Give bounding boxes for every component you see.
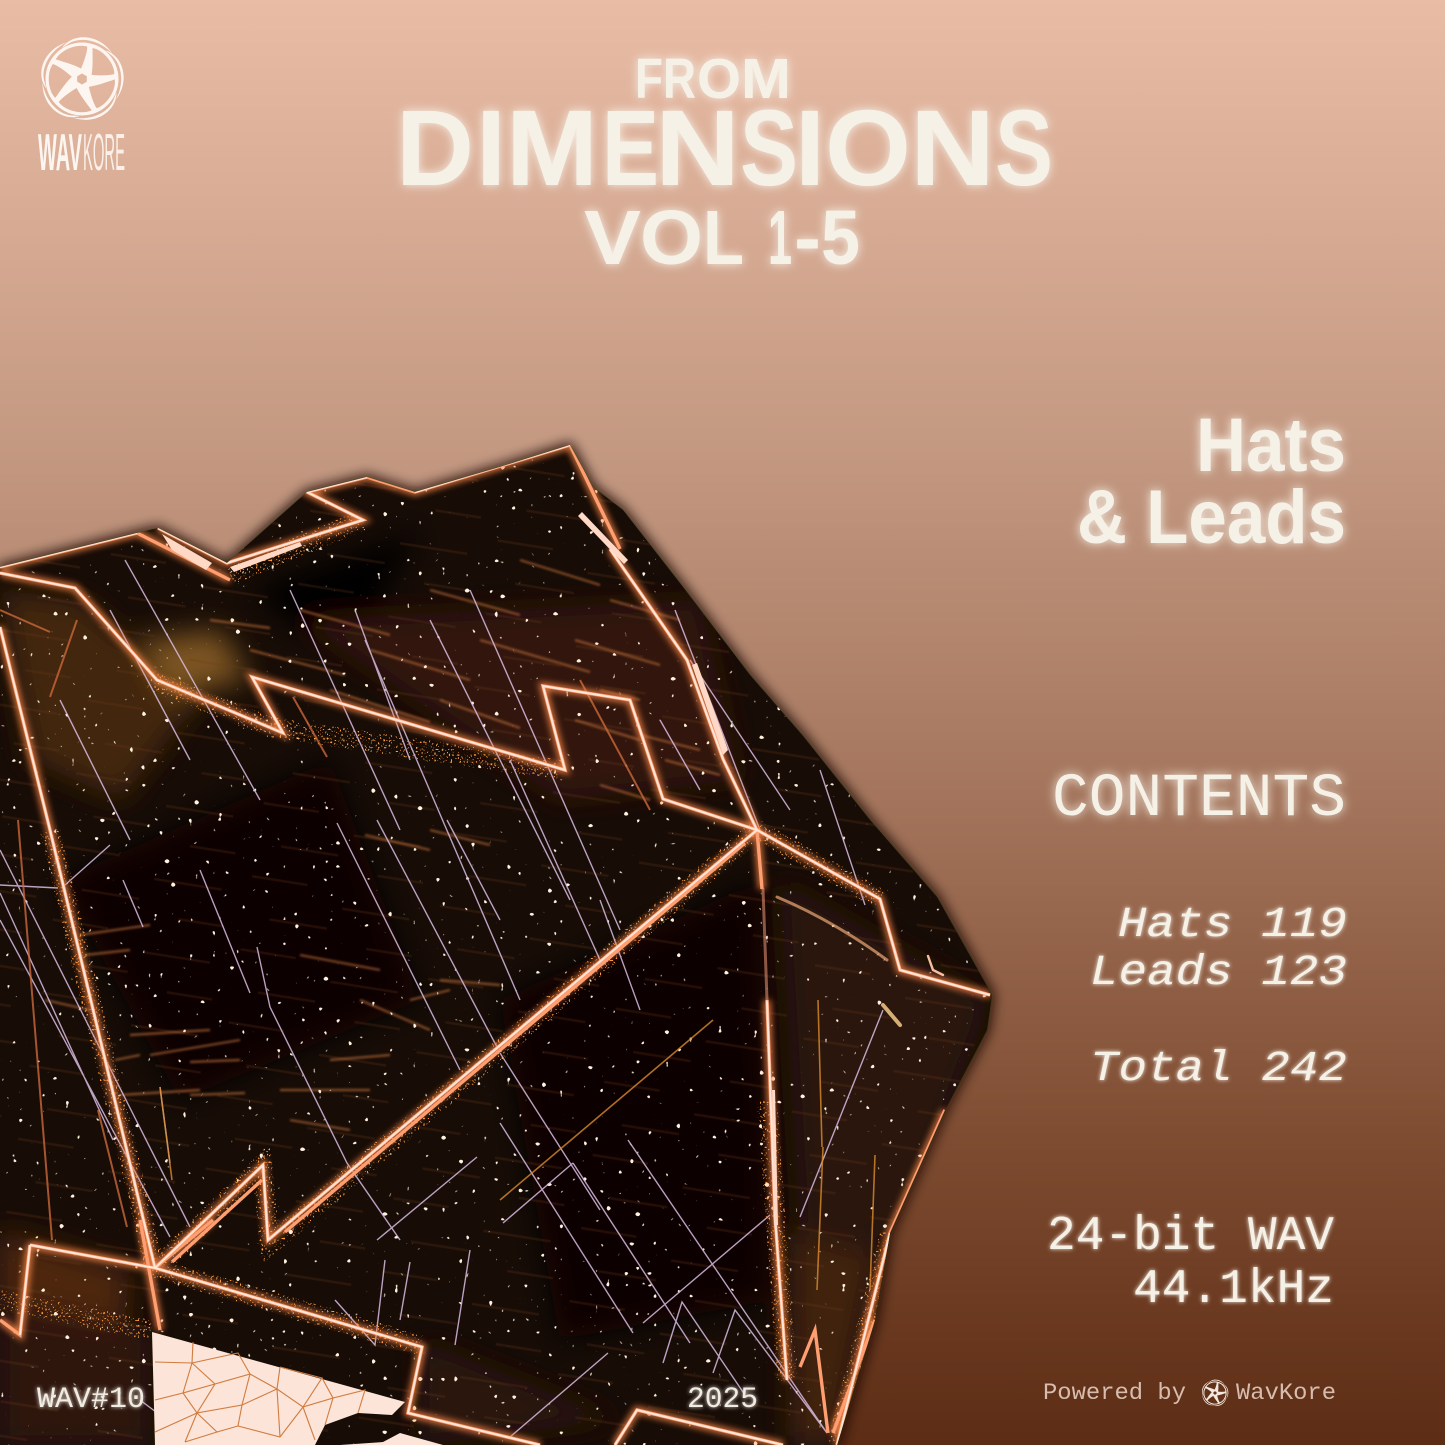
title: E [602, 87, 659, 208]
audio format: 24-bit WAV [1047, 1210, 1334, 1264]
contents list [1090, 901, 1347, 1093]
title: S [995, 87, 1053, 208]
title: M [741, 47, 791, 111]
powered by credit [1043, 1380, 1336, 1409]
tonal patches [0, 530, 990, 1445]
title: 5 [821, 195, 860, 281]
glowing orange edges [0, 445, 990, 1445]
title: - [794, 195, 821, 281]
audio format: 44.1kHz [1133, 1263, 1334, 1317]
title: L [703, 195, 744, 281]
title: F [635, 47, 663, 111]
title: I [795, 87, 825, 208]
pale streak and facets on right [763, 889, 943, 1025]
catalogue number: WAV#10 [37, 1383, 145, 1417]
icon: small WavKore mark [1199, 1380, 1231, 1409]
contents heading: CONTENTS [1052, 765, 1346, 834]
gold streaks [160, 1000, 875, 1290]
contents list: Hats 119 [1118, 901, 1347, 949]
star field [0, 430, 1000, 1445]
title: R [663, 47, 696, 111]
title: I [476, 87, 506, 208]
logo wordmark: WAV [38, 124, 82, 182]
contents list: Leads 123 [1090, 949, 1347, 997]
faint orange vertical edges [0, 610, 650, 1240]
gold dust along edges [0, 520, 890, 1445]
logo: WavKore [33, 37, 131, 182]
glowing edge halo [0, 445, 990, 1445]
bright lower facet with triangular mesh [152, 1332, 443, 1445]
year: 2025 [687, 1383, 758, 1417]
audio format [1047, 1210, 1334, 1317]
bright edge cores [0, 445, 990, 1445]
heading: Hats and Leads [1077, 403, 1346, 560]
title: 1 [768, 195, 792, 281]
title: D [396, 87, 474, 208]
purple filament lines [0, 560, 883, 1445]
title: N [910, 87, 995, 208]
contents list: Total 242 [1090, 1045, 1347, 1093]
title [396, 47, 1053, 281]
title: O [825, 87, 911, 208]
text: KORE [83, 124, 125, 182]
powered by credit: Powered by [1043, 1380, 1186, 1407]
crystal polyhedron illustration [0, 430, 1000, 1445]
title: V [584, 195, 641, 281]
title: S [740, 87, 798, 208]
powered by credit: WavKore [1236, 1380, 1336, 1407]
thick bright accents [162, 512, 778, 1225]
heading: Hats and Leads: & Leads [1077, 475, 1346, 560]
brown texture streaks [45, 560, 720, 1130]
heading: Hats and Leads: Hats [1196, 403, 1346, 488]
title: M [506, 87, 598, 208]
icon: WavKore reel mark [33, 37, 131, 130]
title: O [697, 47, 741, 111]
title: N [655, 87, 740, 208]
title: O [640, 195, 703, 281]
